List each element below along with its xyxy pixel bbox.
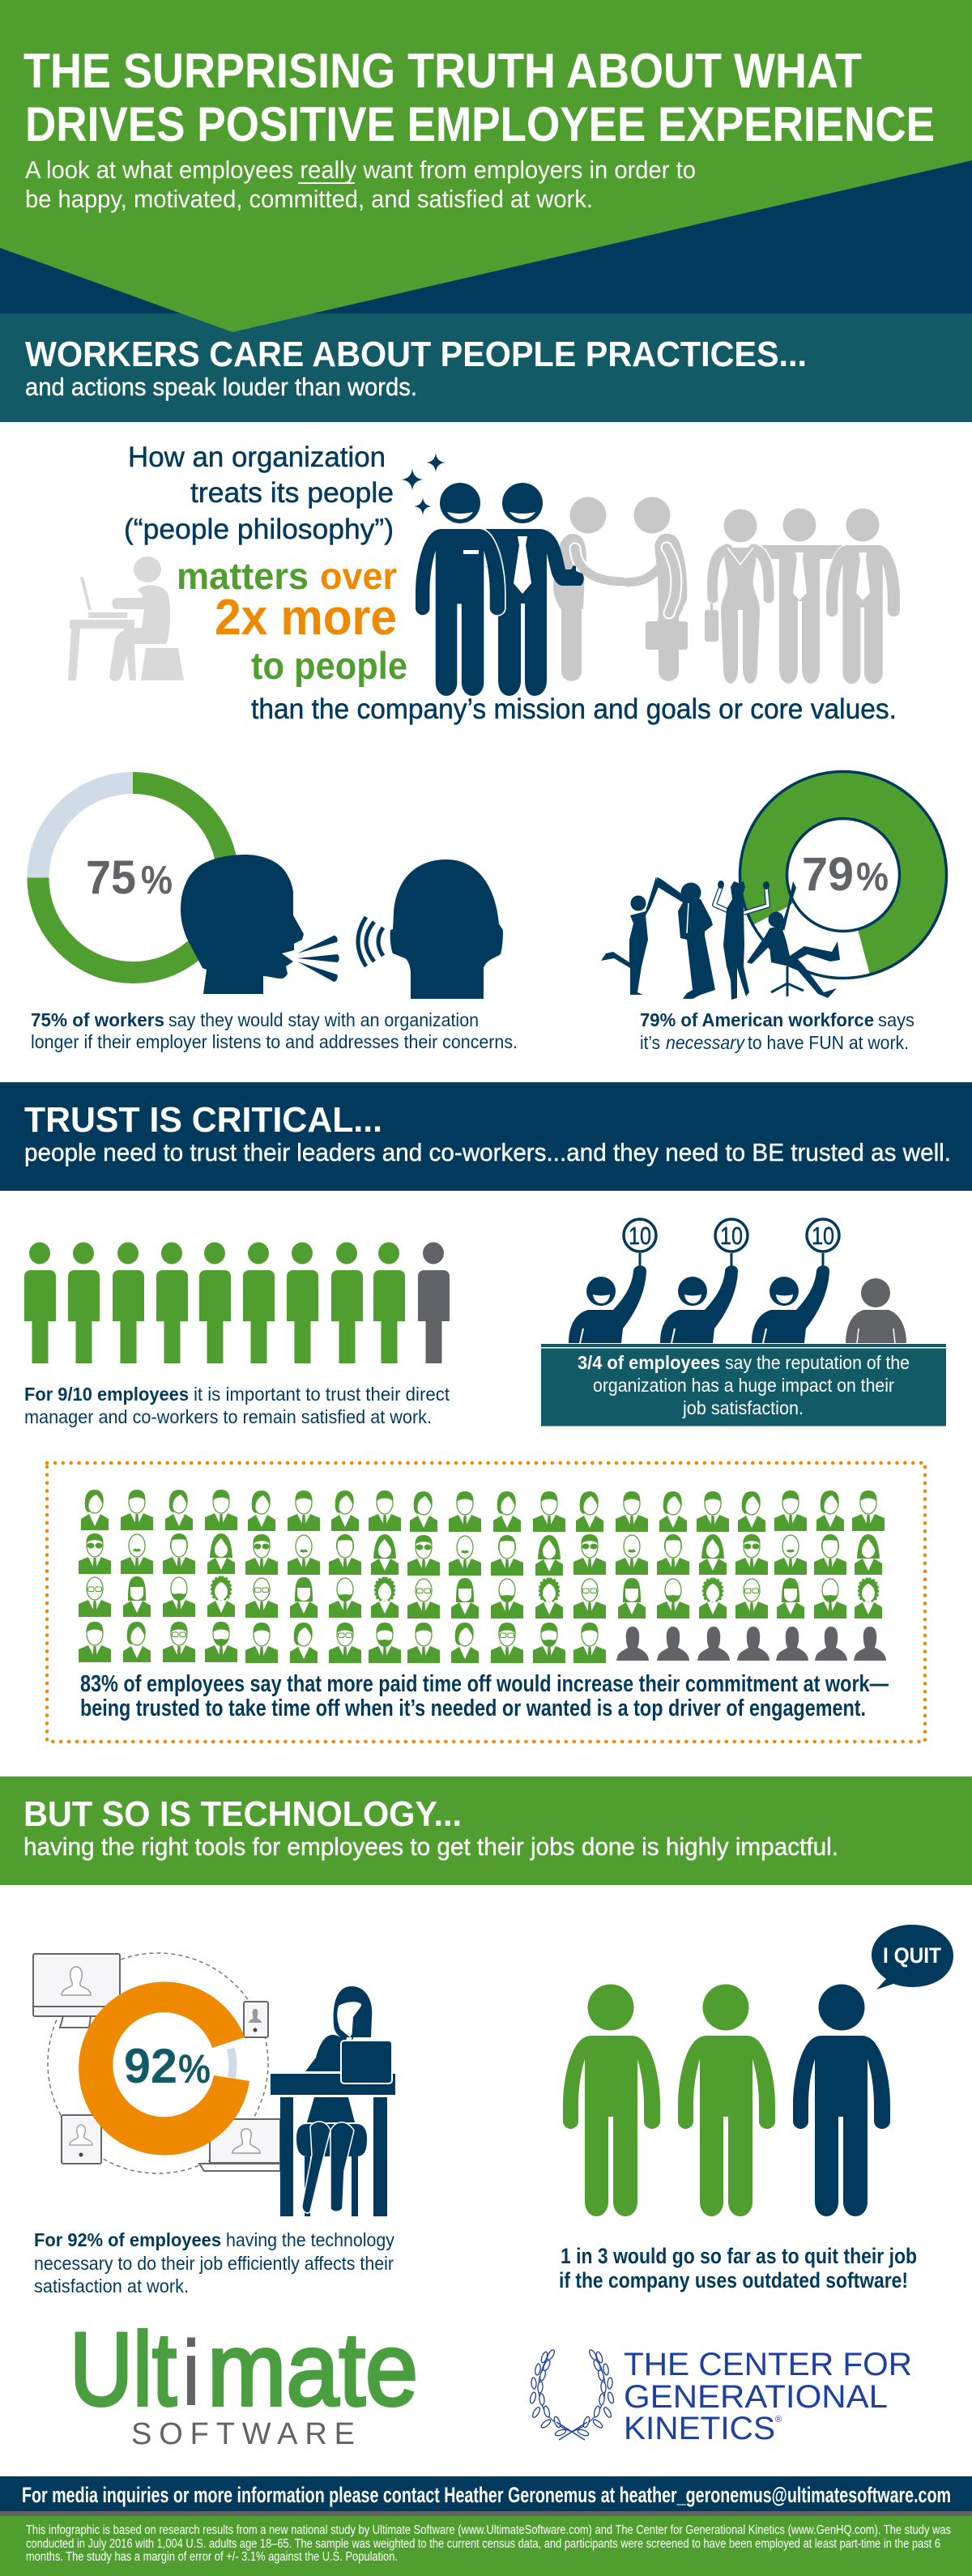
donut chart: 79%: 79 — [802, 848, 854, 901]
icon: phone — [244, 2002, 268, 2037]
subtitle: A look at what employees really want from employers in order to — [25, 156, 696, 184]
donut chart: 79%: % — [856, 855, 889, 899]
panel: dotted frame for 83% — [47, 1463, 925, 1742]
header green chevron — [0, 0, 972, 332]
text: 1 in 3 would quit: 1 in 3 would go so far as to quit their job — [561, 2244, 917, 2268]
section heading: people practices — [25, 335, 807, 401]
speech bubble: I quit: I QUIT — [883, 1943, 941, 1968]
donut chart: 79% — [740, 771, 947, 979]
title: THE SURPRISING TRUTH ABOUT WHAT — [23, 44, 862, 98]
logo: The Center for Generational Kinetics: GENERATIONAL — [624, 2379, 888, 2415]
donut chart: 92%: % — [178, 2046, 211, 2092]
text: 9/10 employees: it is important to trust their direct — [194, 1384, 450, 1405]
icon: tablet — [62, 2115, 101, 2164]
logo: The Center for Generational Kinetics: ® — [775, 2415, 782, 2425]
text: 75% of workers — [31, 1009, 518, 1052]
section band: trust is critical — [0, 1082, 972, 1191]
panel: 3/4 of employees: 3/4 of employees — [578, 1352, 720, 1373]
logo: Ultimate Software — [70, 2312, 418, 2451]
icon: smiling navy business people — [416, 483, 584, 696]
text: 92% of employees: For 92% of employees — [34, 2229, 221, 2250]
text: 79% of American workforce: necessary — [666, 1032, 745, 1053]
text: 79% of American workforce: it’s — [640, 1032, 660, 1053]
text block: people philosophy: than the company’s mission and goals or core values. — [251, 693, 897, 725]
pictogram: 1 in 3 people — [563, 1985, 890, 2216]
text block: people philosophy: to people — [251, 644, 407, 687]
speech bubble: I quit — [872, 1925, 953, 1990]
woman with briefcase — [705, 509, 769, 684]
text block: people philosophy: 2x more — [215, 590, 397, 646]
icon: jury holding score cards: 10 — [720, 1222, 743, 1250]
text: 75% of workers: longer if their employer listens to and addresses their concerns. — [31, 1031, 518, 1052]
donut chart: 92%: 92 — [124, 2039, 177, 2093]
section band: but so is technology — [0, 1776, 972, 1885]
text: 1 in 3 would quit — [559, 2244, 917, 2292]
section heading: people practices: and actions speak louder than words. — [25, 373, 417, 401]
subtitle — [25, 156, 696, 213]
footer: media contact band — [0, 2476, 972, 2511]
section band: but so is technology: having the right tools for employees to get their jobs done is highly impactful. — [23, 1832, 838, 1861]
icon: speaking head — [181, 855, 339, 994]
section heading: people practices: WORKERS CARE ABOUT PEOPLE PRACTICES... — [25, 335, 807, 374]
woman arms up — [714, 881, 770, 1000]
icon: sparkles — [401, 453, 446, 515]
logo: Ultimate Software: i — [183, 2322, 199, 2425]
text: 9/10 employees — [24, 1384, 450, 1427]
text block: people philosophy: (“people philosophy”) — [124, 514, 394, 545]
subtitle: be happy, motivated, committed, and satisfied at work. — [25, 185, 593, 213]
text: 92% of employees: necessary to do their job efficiently affects their — [34, 2253, 394, 2274]
text: 92% of employees: having the technology — [226, 2229, 394, 2250]
dashed connector circle — [48, 1953, 268, 2173]
panel: 3/4 of employees: job satisfaction. — [682, 1397, 804, 1418]
man on right — [826, 509, 900, 684]
text: 92% of employees — [34, 2229, 394, 2297]
text block: people philosophy: treats its people — [190, 477, 394, 509]
donut chart: 75% — [38, 783, 228, 972]
logo: Ultimate Software: SOFTWARE — [131, 2417, 355, 2451]
panel: 3/4 of employees: organization has a huge impact on their — [593, 1375, 894, 1396]
pictogram: 9 of 10 people — [24, 1243, 450, 1363]
panel: 3/4 of employees: say the reputation of the — [725, 1352, 910, 1373]
text: 9/10 employees: For 9/10 employees — [24, 1384, 189, 1405]
logo: Ultimate Software: Ult — [70, 2312, 177, 2428]
pictogram: gray employees — [616, 1627, 886, 1661]
text: 79% of American workforce — [640, 1009, 914, 1053]
section band: trust is critical: people need to trust their leaders and co-workers...and they need to BE trusted as well. — [24, 1138, 951, 1166]
icon: desktop monitor — [33, 1954, 120, 2028]
section band: trust is critical: TRUST IS CRITICAL... — [24, 1100, 382, 1140]
man in falling chair — [747, 881, 840, 998]
text: 9/10 employees: manager and co-workers to remain satisfied at work. — [24, 1406, 432, 1427]
text: 79% of American workforce: to have FUN at work. — [748, 1032, 909, 1053]
text: 75% of workers: say they would stay with an organization — [168, 1009, 479, 1030]
footer: methodology note — [0, 2516, 972, 2576]
donut chart: 75%: 75 — [86, 851, 136, 904]
pictogram: grid of green employees — [79, 1490, 885, 1663]
logo: Ultimate Software: mate — [207, 2312, 418, 2428]
logo: The Center for Generational Kinetics: KINETICS — [624, 2411, 775, 2446]
donut chart: 75%: % — [141, 859, 173, 902]
woman kicking — [601, 876, 659, 995]
icon: jury holding score cards: 10 — [812, 1222, 834, 1250]
text block: people philosophy — [124, 441, 897, 725]
section band: but so is technology: BUT SO IS TECHNOLOGY... — [23, 1794, 462, 1834]
text: 83% of employees — [80, 1671, 889, 1721]
text block: people philosophy: over — [320, 555, 397, 597]
icon: gray group of three — [705, 509, 900, 684]
footer divider — [0, 2511, 972, 2516]
text: 1 in 3 would quit: if the company uses outdated software! — [559, 2268, 908, 2292]
icon: laptop — [199, 2119, 280, 2171]
icon: jury holding score cards: 10 — [629, 1222, 651, 1250]
text: 79% of American workforce: 79% of American workforce — [640, 1009, 874, 1030]
title — [23, 44, 935, 151]
section band: workers care about people practices — [0, 313, 972, 422]
icon: seated person at laptop — [68, 557, 184, 681]
donut chart: 92% — [79, 1982, 249, 2156]
text: 79% of American workforce: says — [878, 1009, 914, 1030]
text block: people philosophy: How an organization — [128, 441, 386, 473]
text block: people philosophy: matters — [177, 555, 309, 597]
icon: celebrating coworkers — [601, 876, 840, 1000]
panel: 3/4 of employees — [541, 1344, 946, 1426]
icon: woman at desk with laptop — [271, 1986, 395, 2216]
logo: The Center for Generational Kinetics — [529, 2347, 912, 2446]
text: 75% of workers: 75% of workers — [31, 1009, 164, 1030]
footer: methodology note: months. The study has a margin of error of +/- 3.1% against the U.S. Population. — [26, 2550, 398, 2564]
icon: jury holding score cards — [569, 1219, 906, 1343]
logo: The Center for Generational Kinetics: THE CENTER FOR — [624, 2347, 912, 2382]
man high five — [657, 877, 715, 999]
icon: handshake pair with briefcase — [553, 497, 688, 681]
header background: navy — [0, 0, 972, 314]
icon: listening head with sound waves — [358, 859, 503, 999]
person with band — [759, 509, 842, 684]
text: 92% of employees: satisfaction at work. — [34, 2275, 189, 2297]
